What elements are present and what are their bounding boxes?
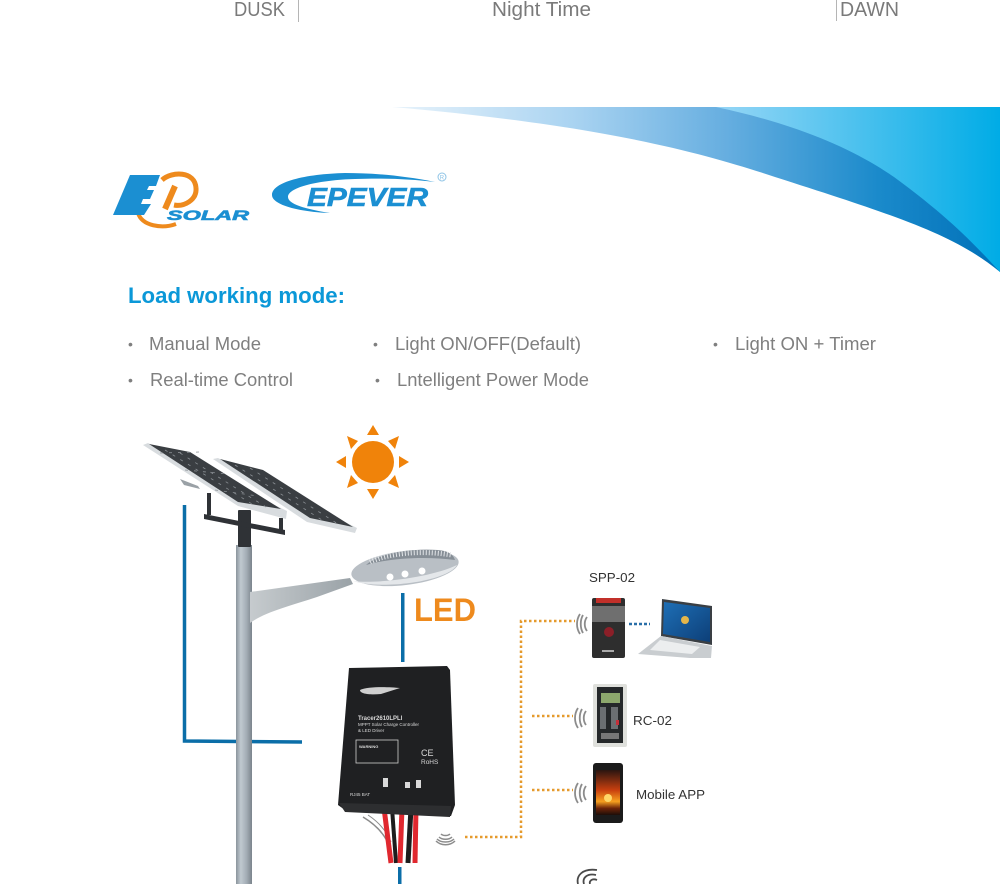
pole bracket [204,493,285,547]
wiring: controller to ground [398,867,402,884]
icon: sun [336,425,409,499]
mode list: • [713,336,718,352]
heading: load working mode: Load working mode: [128,283,345,308]
controller terminals [339,803,451,817]
controller printed text: Tracer2610LPLI [358,716,403,722]
solar panel left [143,443,287,519]
lamp arm [250,578,353,623]
header swoosh [392,107,1000,272]
icon: controller wireless [436,834,455,845]
street light [143,443,461,884]
controller printed text [350,687,439,797]
mode list: • [128,336,133,352]
logo: EP Solar [113,174,250,226]
wireless link: dotted connections [465,621,575,837]
pole [236,545,252,884]
icon: wireless RC-02 [575,708,586,728]
SPP-02 label: SPP-02 [589,570,635,585]
LED label: LED [414,592,476,628]
solar charge controller [338,666,455,863]
mode list: Lntelligent Power Mode [397,370,589,390]
logo: EPEVER [272,173,446,213]
solar panel right [213,458,357,533]
icon: wireless SPP-02 [577,614,587,634]
connection: SPP-02 to laptop [629,623,650,625]
Mobile APP label: Mobile APP [636,787,705,802]
controller printed text: RJ45 BAT [350,792,370,797]
device: laptop [638,599,712,658]
device: RC-02 [593,684,627,747]
wiring: LED to controller [401,593,404,662]
logo: EPEVER: EPEVER [307,182,428,212]
mode list: Real-time Control [150,370,293,390]
controller printed text: RoHS [421,759,439,766]
controller body [338,666,455,816]
mode list: Light ON/OFF(Default) [395,334,581,354]
wiring: solar panel to controller [184,505,302,742]
mode list [128,334,876,390]
device: SPP-02 [592,598,625,658]
icon: wireless bottom [578,870,597,884]
mode list: Manual Mode [149,334,261,354]
mode list: • [375,372,380,388]
mode list: • [373,336,378,352]
top timeline labels [234,0,899,22]
controller printed text: WARNING [359,744,378,749]
mode list: • [128,372,133,388]
mode list: Light ON + Timer [735,334,876,354]
controller printed text: CE [421,748,434,758]
wires [363,808,416,863]
RC-02 label: RC-02 [633,713,672,728]
device: mobile phone [593,763,623,823]
controller printed text: & LED Driver [358,728,385,733]
icon: wireless mobile [575,783,586,803]
logo: EP Solar: SOLAR [167,207,250,223]
lamp head [349,545,461,591]
logo: EPEVER: R [440,176,445,182]
controller printed text: MPPT Solar Charge Controller [358,722,419,727]
